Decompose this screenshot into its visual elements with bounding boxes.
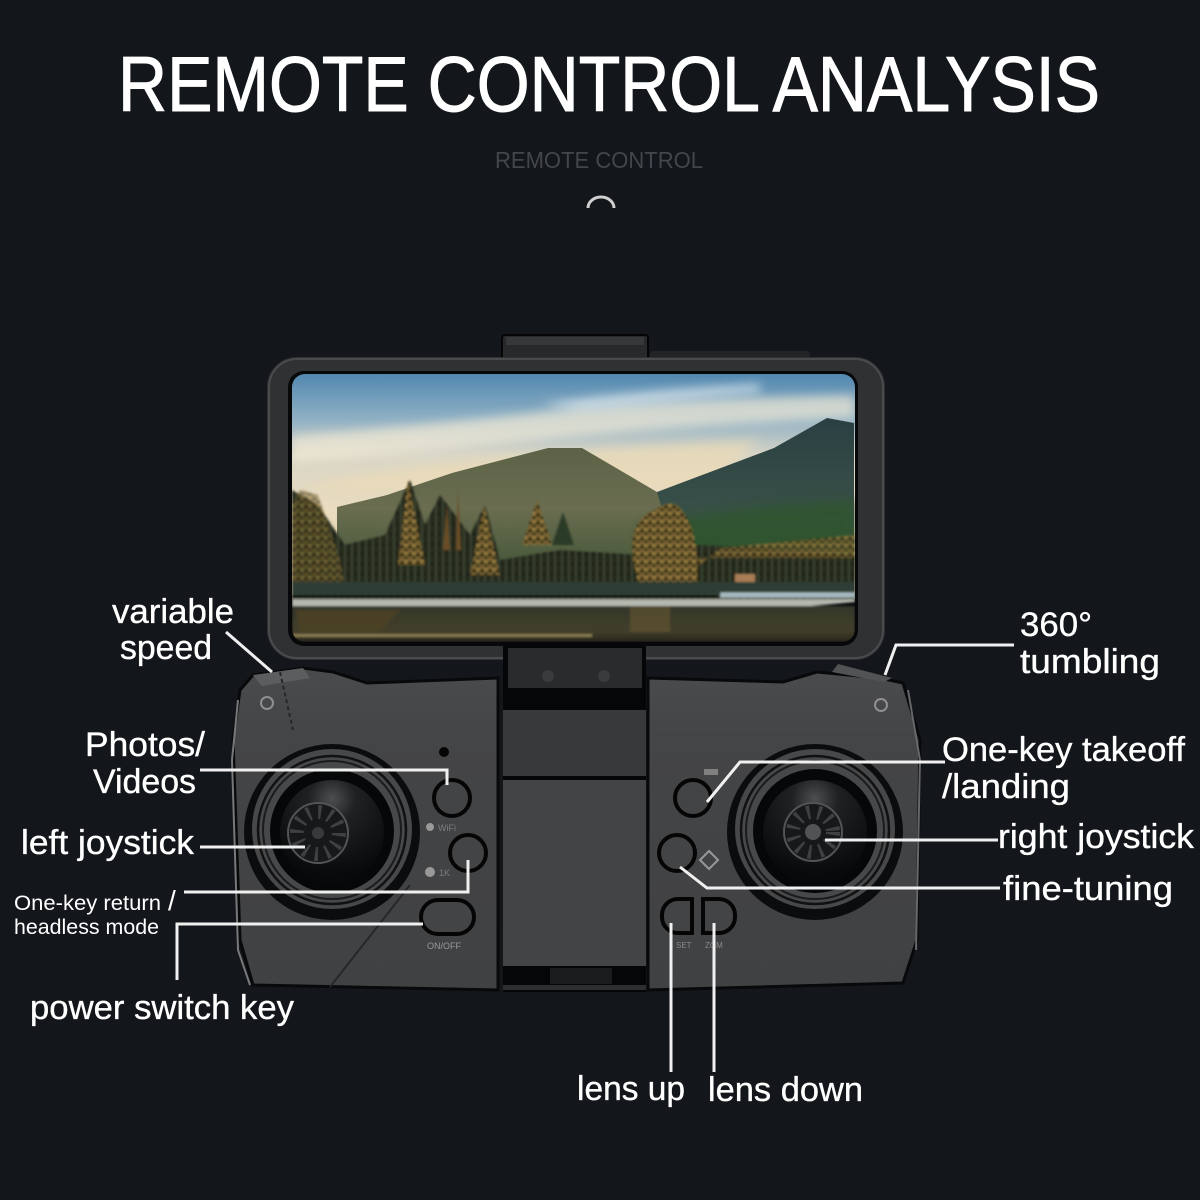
label: variable speed: variable [112, 593, 234, 631]
remote controller [232, 335, 920, 992]
callout lines [177, 632, 1014, 1072]
forest and trees [292, 480, 855, 600]
left grip: ON/OFF [427, 941, 461, 951]
label: 360 tumbling [1020, 606, 1160, 681]
label: variable speed [112, 593, 234, 667]
phone body [267, 351, 885, 660]
label: 360 tumbling: tumbling [1020, 643, 1160, 681]
label: right joystick: right joystick [998, 818, 1195, 856]
label: left joystick: left joystick [21, 824, 195, 862]
indicator light [439, 747, 449, 757]
right joystick [727, 744, 903, 920]
right grip: SET [676, 941, 692, 950]
right grip: ZOM [705, 941, 723, 950]
centre hinge and bridge [503, 646, 646, 992]
label: one-key return headless mode: One-key return [14, 892, 161, 915]
label: lens up: lens up [577, 1070, 685, 1108]
phone clamp top [502, 335, 648, 367]
label: power switch key: power switch key [30, 989, 294, 1027]
label: one-key return headless mode: / [168, 885, 176, 916]
subtitle: remote control: REMOTE CONTROL [495, 147, 703, 173]
lake [292, 592, 855, 642]
label: photos videos [85, 726, 206, 801]
left grip [232, 668, 498, 990]
right grip [648, 664, 920, 990]
label: fine-tuning: fine-tuning [1003, 870, 1173, 908]
label: one-key takeoff landing: /landing [942, 768, 1070, 806]
label: 360 tumbling: 360° [1020, 606, 1092, 644]
buttons [421, 780, 735, 934]
label: one-key takeoff landing: One-key takeoff [942, 731, 1186, 769]
label: photos videos: Videos [93, 763, 196, 801]
icon: small arc [588, 197, 614, 208]
mountains [657, 418, 854, 600]
label: photos videos: Photos/ [85, 726, 206, 764]
label: one-key return headless mode [14, 885, 176, 939]
label: variable speed: speed [120, 629, 212, 667]
label: one-key takeoff landing [942, 731, 1186, 806]
left grip: 1K [439, 868, 450, 878]
clouds [292, 395, 855, 462]
left joystick [244, 744, 420, 920]
label: lens down: lens down [708, 1071, 863, 1109]
left grip: WiFi [438, 823, 456, 833]
label: one-key return headless mode: headless mode [14, 916, 159, 939]
phone screen: landscape photo [292, 374, 855, 642]
